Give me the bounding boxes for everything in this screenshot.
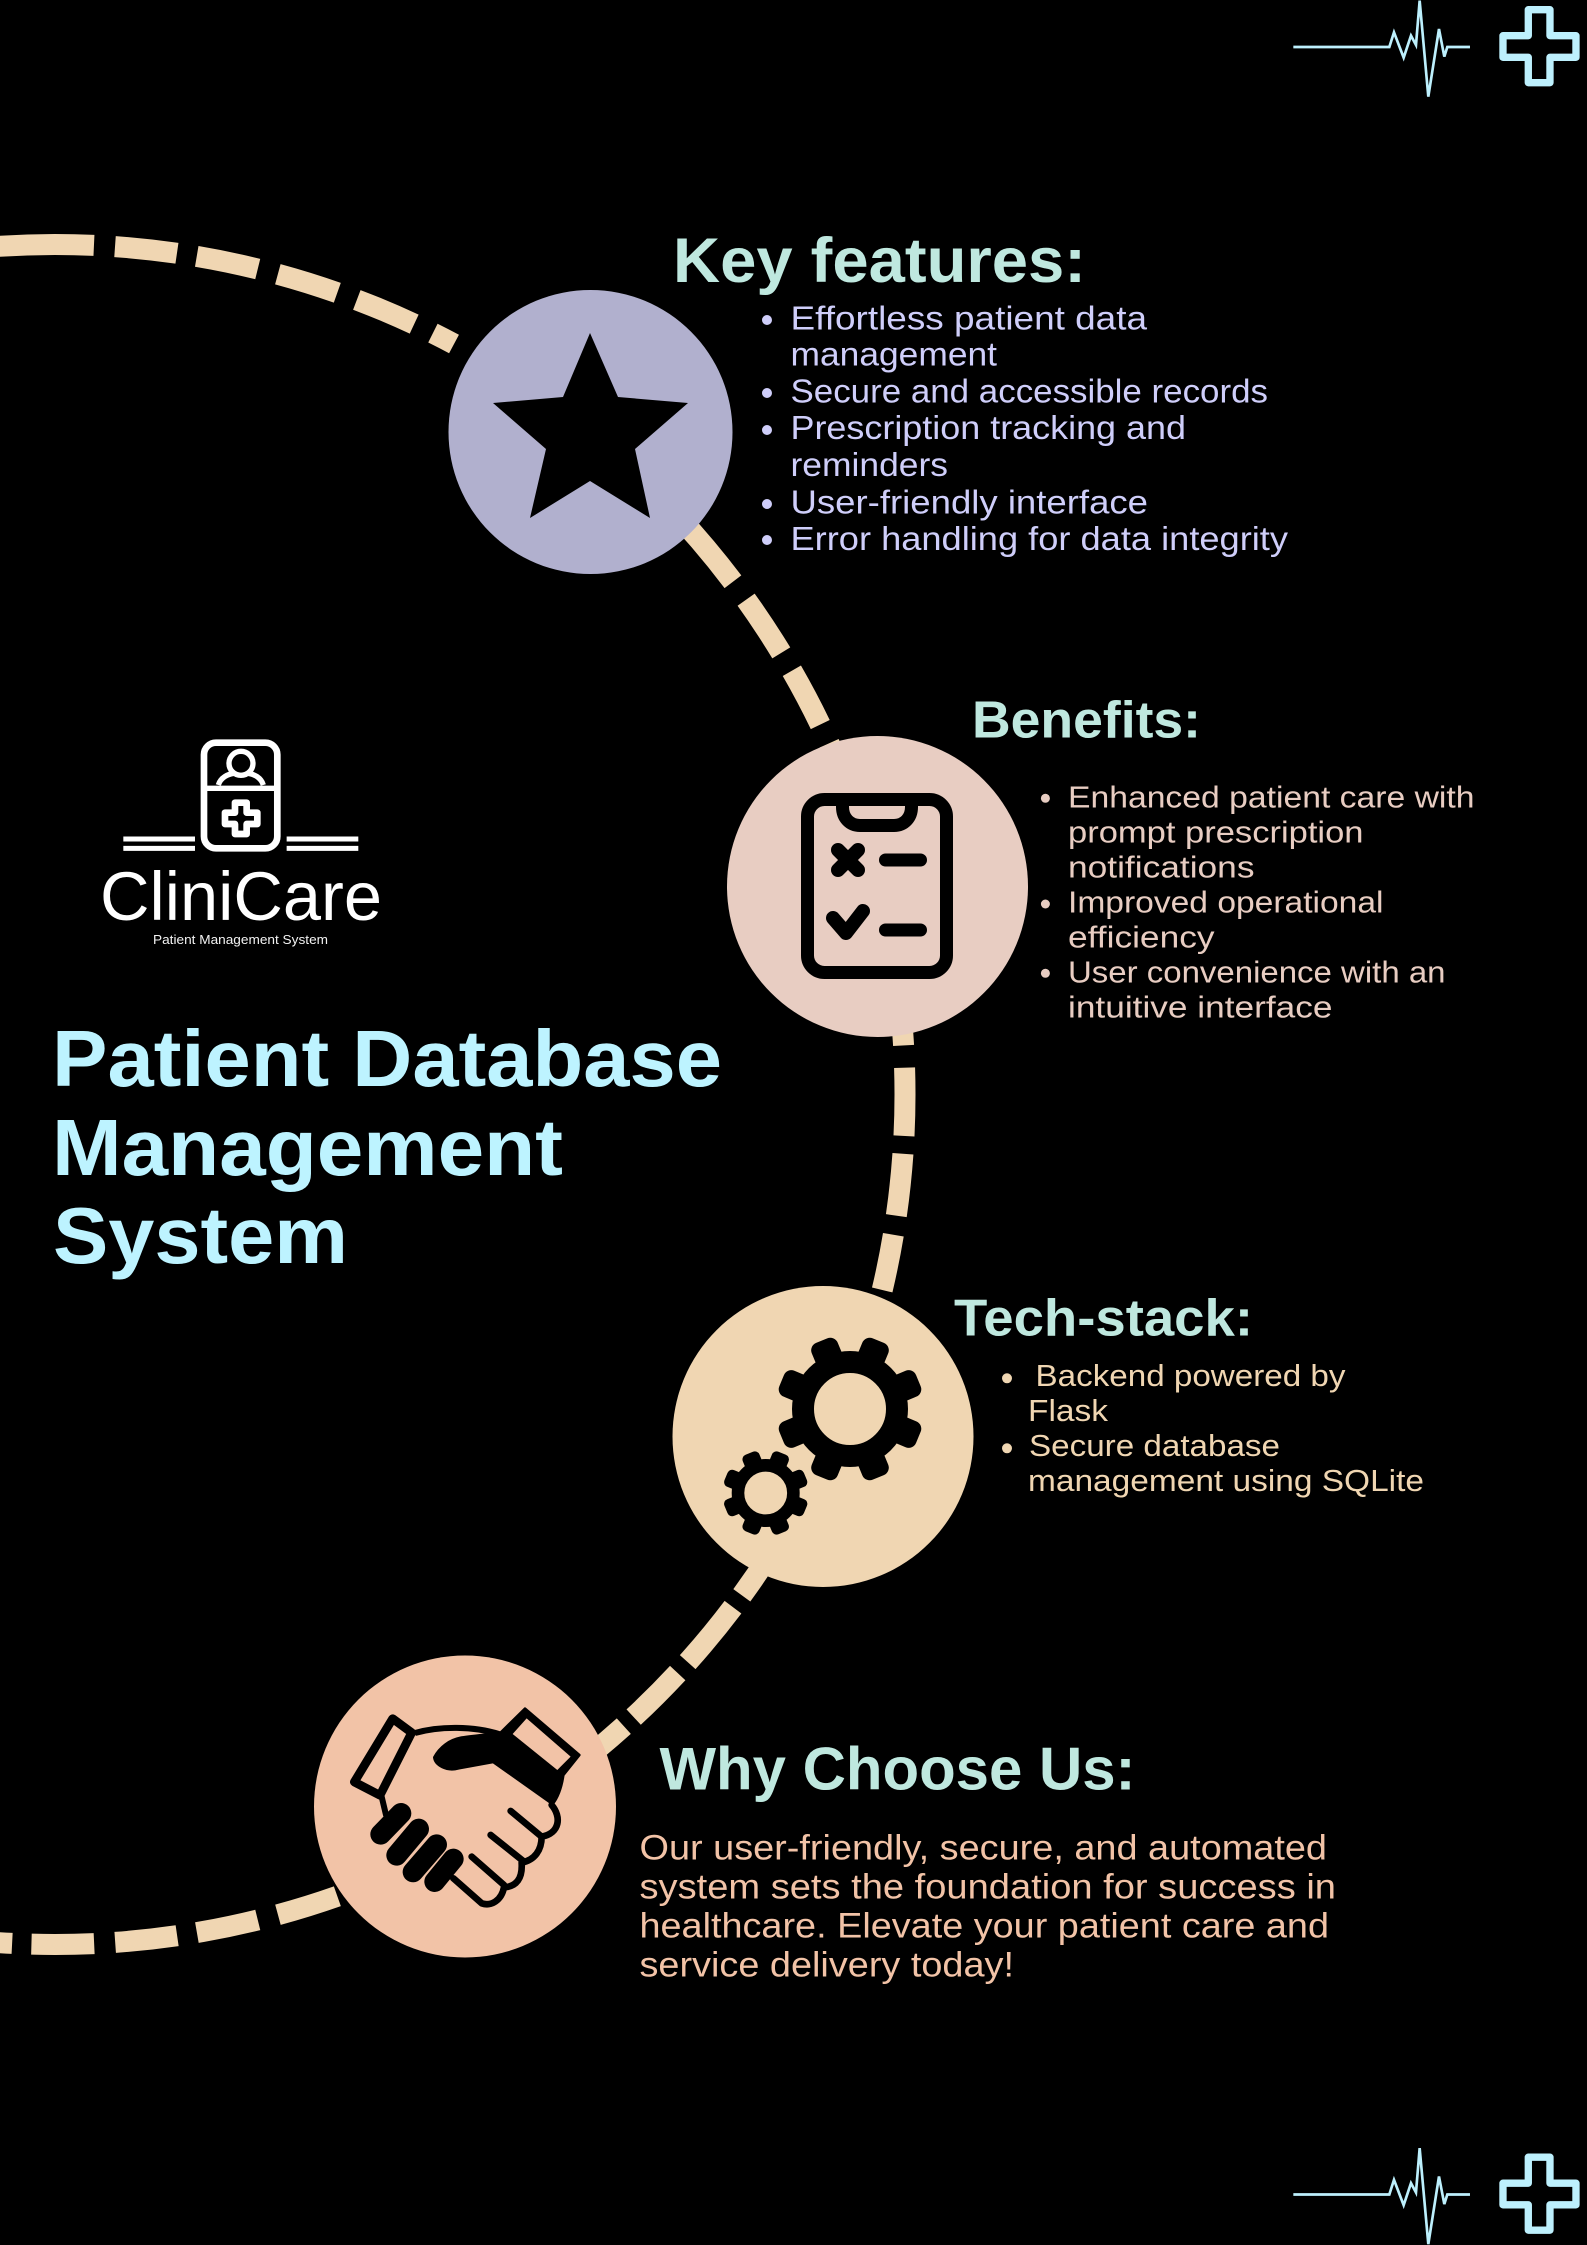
dashed arc connecting the steps: [0, 110, 1040, 2079]
list: benefits: notifications: [1068, 850, 1254, 885]
list: benefits: Enhanced patient care with: [1068, 779, 1474, 814]
logo icon: patient card: [123, 743, 358, 848]
icon: gears in tan circle: [672, 1286, 974, 1587]
panel: key features: [448, 226, 1289, 574]
list: tech stack: Flask: [1028, 1393, 1109, 1428]
list: benefits: efficiency: [1068, 919, 1215, 954]
list: key features: management: [790, 336, 997, 373]
list: benefits: intuitive interface: [1068, 989, 1332, 1024]
list: key features: reminders: [790, 446, 948, 483]
title: Patient Database: [52, 1014, 722, 1103]
logo wordmark: CliniCare: [100, 858, 382, 935]
panel: tech stack: [672, 1286, 1424, 1587]
heading: why choose us: Why Choose Us:: [660, 1735, 1136, 1802]
panel: why choose us: [314, 1656, 1336, 1985]
title: System: [53, 1191, 348, 1280]
logo tagline: Patient Management System: [153, 933, 328, 947]
text: why choose us paragraph: [640, 1827, 1336, 1985]
text: why choose us paragraph: service delivery today!: [640, 1945, 1014, 1985]
list: benefits: User convenience with an: [1068, 955, 1446, 990]
heading: key features: Key features:: [673, 226, 1086, 296]
heading: tech stack: Tech-stack:: [954, 1290, 1253, 1348]
list: benefits: [1041, 779, 1474, 1024]
icon: heartbeat and cross, bottom right: [1293, 2148, 1576, 2244]
list: key features: User-friendly interface: [790, 483, 1148, 520]
list: benefits: Improved operational: [1068, 884, 1384, 919]
panel: benefits: [727, 692, 1474, 1037]
list: tech stack: [1002, 1358, 1424, 1498]
logo: CliniCare: [100, 743, 382, 947]
list: tech stack: Backend powered by: [1036, 1358, 1346, 1393]
title: Management: [52, 1103, 563, 1192]
icon: handshake in peach circle: [314, 1656, 616, 1958]
list: tech stack: Secure database: [1029, 1428, 1280, 1463]
icon: star in lavender circle: [448, 290, 732, 574]
title: [52, 1014, 722, 1280]
list: key features: Secure and accessible records: [790, 372, 1268, 409]
list: key features: Prescription tracking and: [790, 409, 1186, 446]
icon: heartbeat and cross, top right: [1293, 1, 1576, 97]
text: why choose us paragraph: healthcare. Elevate your patient care and: [640, 1906, 1329, 1946]
text: why choose us paragraph: Our user-friendly, secure, and automated: [640, 1827, 1327, 1867]
list: key features: [762, 299, 1289, 557]
list: key features: Error handling for data integrity: [790, 520, 1289, 557]
list: tech stack: management using SQLite: [1028, 1463, 1424, 1498]
list: key features: Effortless patient data: [790, 299, 1148, 336]
icon: clipboard checklist in pink circle: [727, 736, 1028, 1037]
text: why choose us paragraph: system sets the foundation for success in: [640, 1866, 1336, 1906]
list: benefits: prompt prescription: [1068, 815, 1364, 850]
heading: benefits: Benefits:: [972, 692, 1201, 750]
